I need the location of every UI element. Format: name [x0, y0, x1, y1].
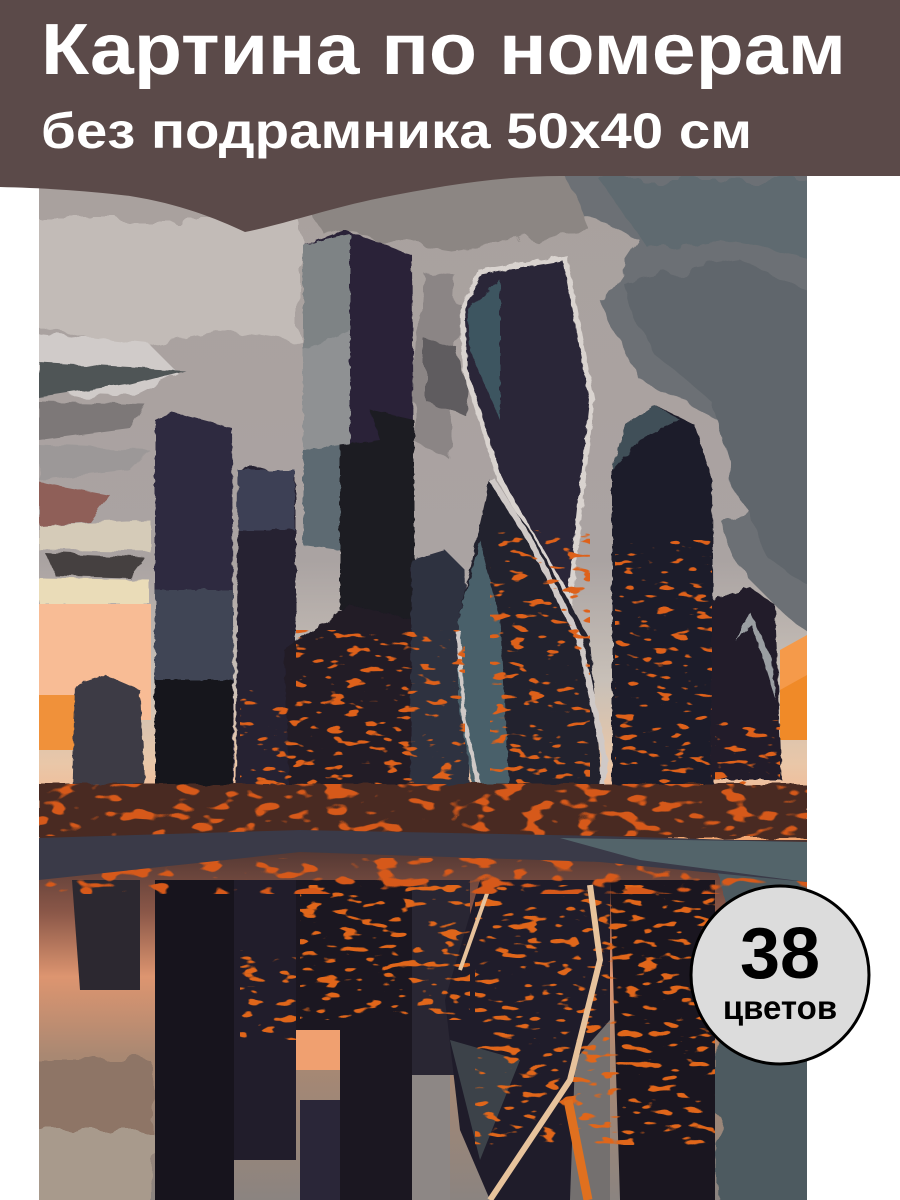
left low tower — [72, 675, 145, 790]
twisted tower upper and lower — [458, 258, 605, 805]
towers and skyline — [72, 230, 782, 810]
right low tower — [710, 587, 782, 780]
badge: 38 colours: 38 — [740, 914, 820, 994]
title: Картина по номерам — [41, 10, 846, 90]
tall tower — [284, 230, 420, 810]
badge: 38 colours — [691, 886, 869, 1064]
subtitle: без подрамника 50х40 см — [41, 103, 752, 159]
header banner — [0, 0, 900, 232]
tower 1 — [155, 412, 234, 800]
badge: 38 colours: цветов — [723, 989, 837, 1026]
sky background — [39, 176, 807, 840]
city lights — [240, 530, 785, 810]
mid tower — [410, 550, 470, 800]
dome tower — [612, 405, 714, 790]
shoreline lights — [39, 784, 807, 838]
painting: Moscow City skyline at sunset — [10, 166, 830, 1200]
embankment — [39, 830, 807, 882]
water reflection — [10, 840, 830, 1200]
tower 2 — [236, 465, 296, 790]
